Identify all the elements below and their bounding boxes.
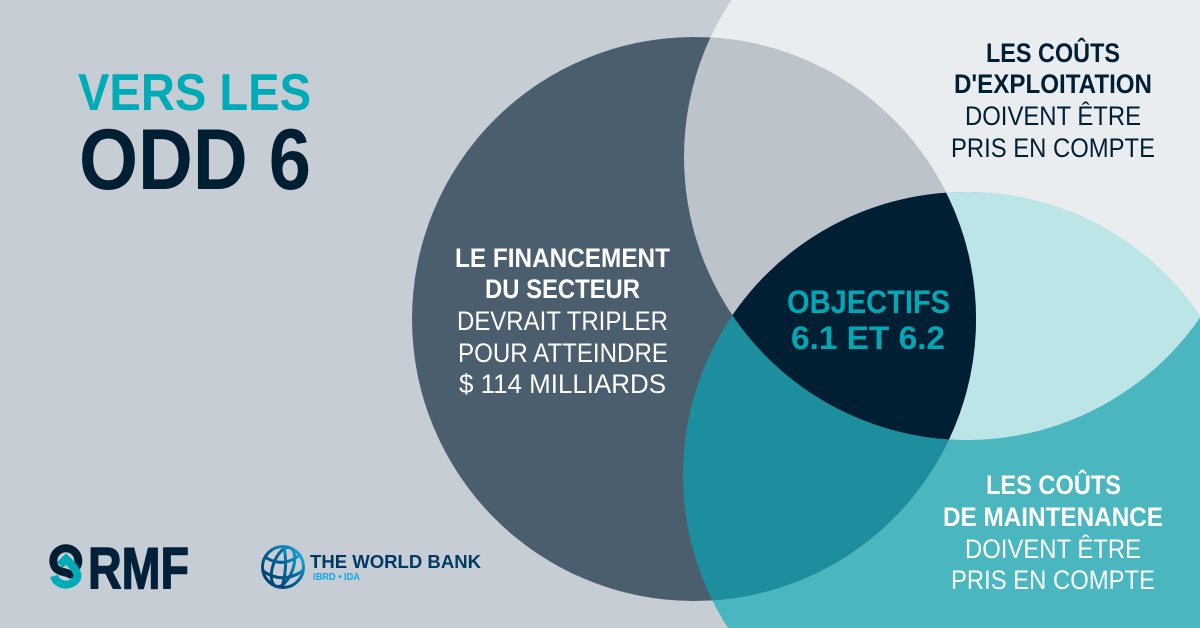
text: operating costs: D'EXPLOITATION <box>954 69 1152 99</box>
title line 1: VERS LES <box>78 64 311 122</box>
icon: linked drop <box>53 548 78 585</box>
overlap: operating and maintenance <box>946 192 1200 440</box>
text: operating costs: PRIS EN COMPTE <box>951 133 1155 163</box>
text: maintenance costs: PRIS EN COMPTE <box>951 565 1155 595</box>
text: maintenance costs: DE MAINTENANCE <box>943 502 1163 532</box>
logo name: THE WORLD BANK <box>310 551 482 572</box>
text: operating costs <box>951 37 1155 163</box>
text: sector financing: $ 114 MILLIARDS <box>459 369 666 399</box>
title line 2: ODD 6 <box>79 112 311 208</box>
overlap: financing and operating <box>684 38 946 316</box>
text: sector financing: DU SECTEUR <box>485 274 640 304</box>
text: sector financing: LE FINANCEMENT <box>455 243 670 273</box>
text: targets: 6.1 ET 6.2 <box>791 320 945 356</box>
logo subtitle: IBRD • IDA <box>313 571 360 583</box>
text: targets <box>787 284 950 356</box>
center overlap: targets <box>732 192 976 440</box>
circle: operating costs <box>684 0 1200 440</box>
text: operating costs: DOIVENT ÊTRE <box>965 100 1141 131</box>
text: sector financing: POUR ATTEINDRE <box>458 338 668 368</box>
logo: The World Bank <box>262 544 482 590</box>
text: maintenance costs <box>943 469 1163 595</box>
circle: maintenance costs <box>683 192 1200 628</box>
text: targets: OBJECTIFS <box>787 284 950 320</box>
icon: globe <box>262 544 304 590</box>
text: maintenance costs: LES COÛTS <box>986 469 1121 500</box>
logo: SRMF <box>53 536 189 602</box>
logo wordmark: RMF <box>88 536 189 602</box>
venn diagram <box>412 0 1200 628</box>
circle: sector financing <box>412 37 976 601</box>
overlap: financing and maintenance <box>683 192 976 600</box>
text: operating costs: LES COÛTS <box>986 37 1120 68</box>
text: sector financing: DEVRAIT TRIPLER <box>457 306 668 336</box>
text: maintenance costs: DOIVENT ÊTRE <box>965 533 1141 564</box>
title <box>78 64 311 208</box>
text: sector financing <box>455 243 670 399</box>
